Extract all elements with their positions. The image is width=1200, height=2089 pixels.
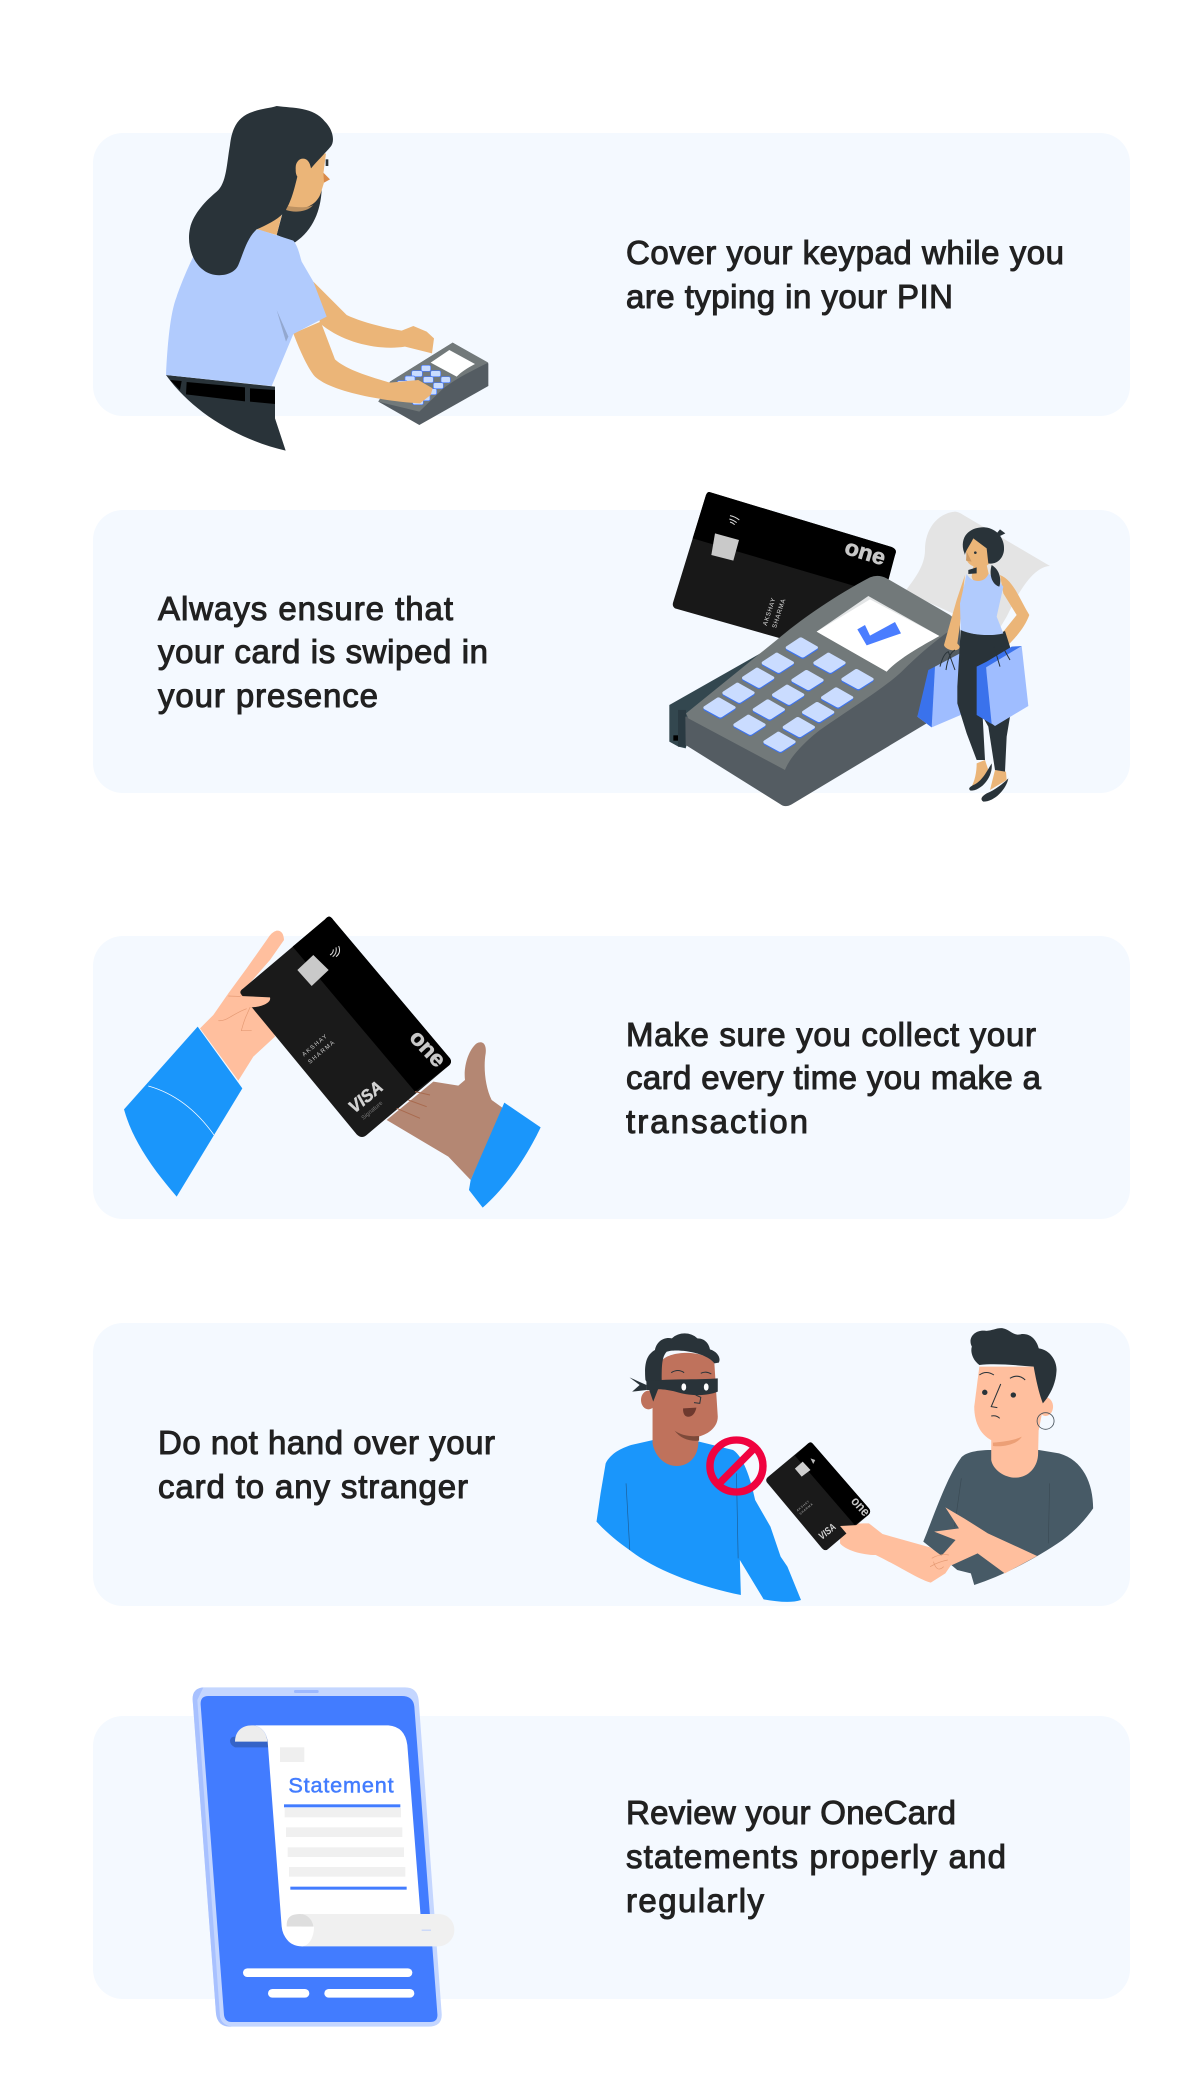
text: collect card tip: card every time you make a: [626, 1059, 1042, 1096]
illustration: phone showing statement: Statement: [288, 1773, 394, 1798]
panel background: [93, 1323, 1130, 1606]
illustration: masked stranger and cardholder: one: [848, 1494, 874, 1519]
text: cover keypad tip: are typing in your PIN: [626, 278, 953, 315]
panel background: [93, 510, 1130, 793]
text: stranger tip: Do not hand over your: [158, 1424, 495, 1461]
text: review statements tip: regularly: [626, 1882, 764, 1919]
text: review statements tip: statements properly and: [626, 1838, 1006, 1875]
illustration: hands passing card: SHARMA: [307, 1039, 337, 1066]
illustration: masked stranger and cardholder: VISA: [817, 1522, 839, 1542]
text: swipe in presence tip: your card is swiped in: [158, 633, 488, 670]
illustration: hands passing card: AKSHAY: [301, 1033, 330, 1058]
text: collect card tip: [626, 1016, 1042, 1140]
panel background: [93, 1716, 1130, 1999]
illustration: phone showing statement: [193, 1687, 454, 2027]
illustration: masked stranger and cardholder: SHARMA: [798, 1502, 814, 1516]
panel: review statements: [93, 1687, 1130, 2027]
panel: card swiped in presence: [93, 492, 1130, 806]
panel: do not hand over card: [93, 1323, 1130, 1606]
text: cover keypad tip: Cover your keypad while you: [626, 234, 1064, 271]
panel background: [93, 936, 1130, 1219]
text: collect card tip: Make sure you collect your: [626, 1016, 1036, 1053]
text: collect card tip: transaction: [626, 1103, 808, 1140]
text: cover keypad tip: [626, 234, 1064, 315]
text: swipe in presence tip: Always ensure that: [158, 590, 453, 627]
illustration: card terminal and shopper: AKSHAY: [762, 597, 778, 627]
text: review statements tip: Review your OneCard: [626, 1794, 956, 1831]
panel: cover your keypad: [93, 106, 1130, 451]
text: swipe in presence tip: your presence: [158, 677, 378, 714]
text: stranger tip: [158, 1424, 495, 1505]
panel background: [93, 133, 1130, 416]
illustration: card terminal and shopper: SHARMA: [771, 597, 788, 629]
illustration: masked stranger and cardholder: AKSHAY: [796, 1499, 811, 1512]
text: review statements tip: [626, 1794, 1006, 1919]
text: stranger tip: card to any stranger: [158, 1468, 468, 1505]
panel: collect your card: [93, 917, 1130, 1219]
illustration: hands passing card: VISA: [344, 1077, 387, 1117]
illustration: card terminal and shopper: one: [842, 534, 889, 570]
illustration: woman typing PIN on keypad: [166, 106, 488, 451]
illustration: card terminal and shopper: [669, 492, 1050, 806]
illustration: masked stranger and cardholder: [596, 1328, 1093, 1602]
illustration: hands passing card: [124, 917, 541, 1208]
illustration: hands passing card: one: [405, 1025, 451, 1072]
text: swipe in presence tip: [158, 590, 488, 714]
icon: prohibited sign: [710, 1440, 763, 1492]
illustration: hands passing card: Signature: [361, 1100, 385, 1122]
